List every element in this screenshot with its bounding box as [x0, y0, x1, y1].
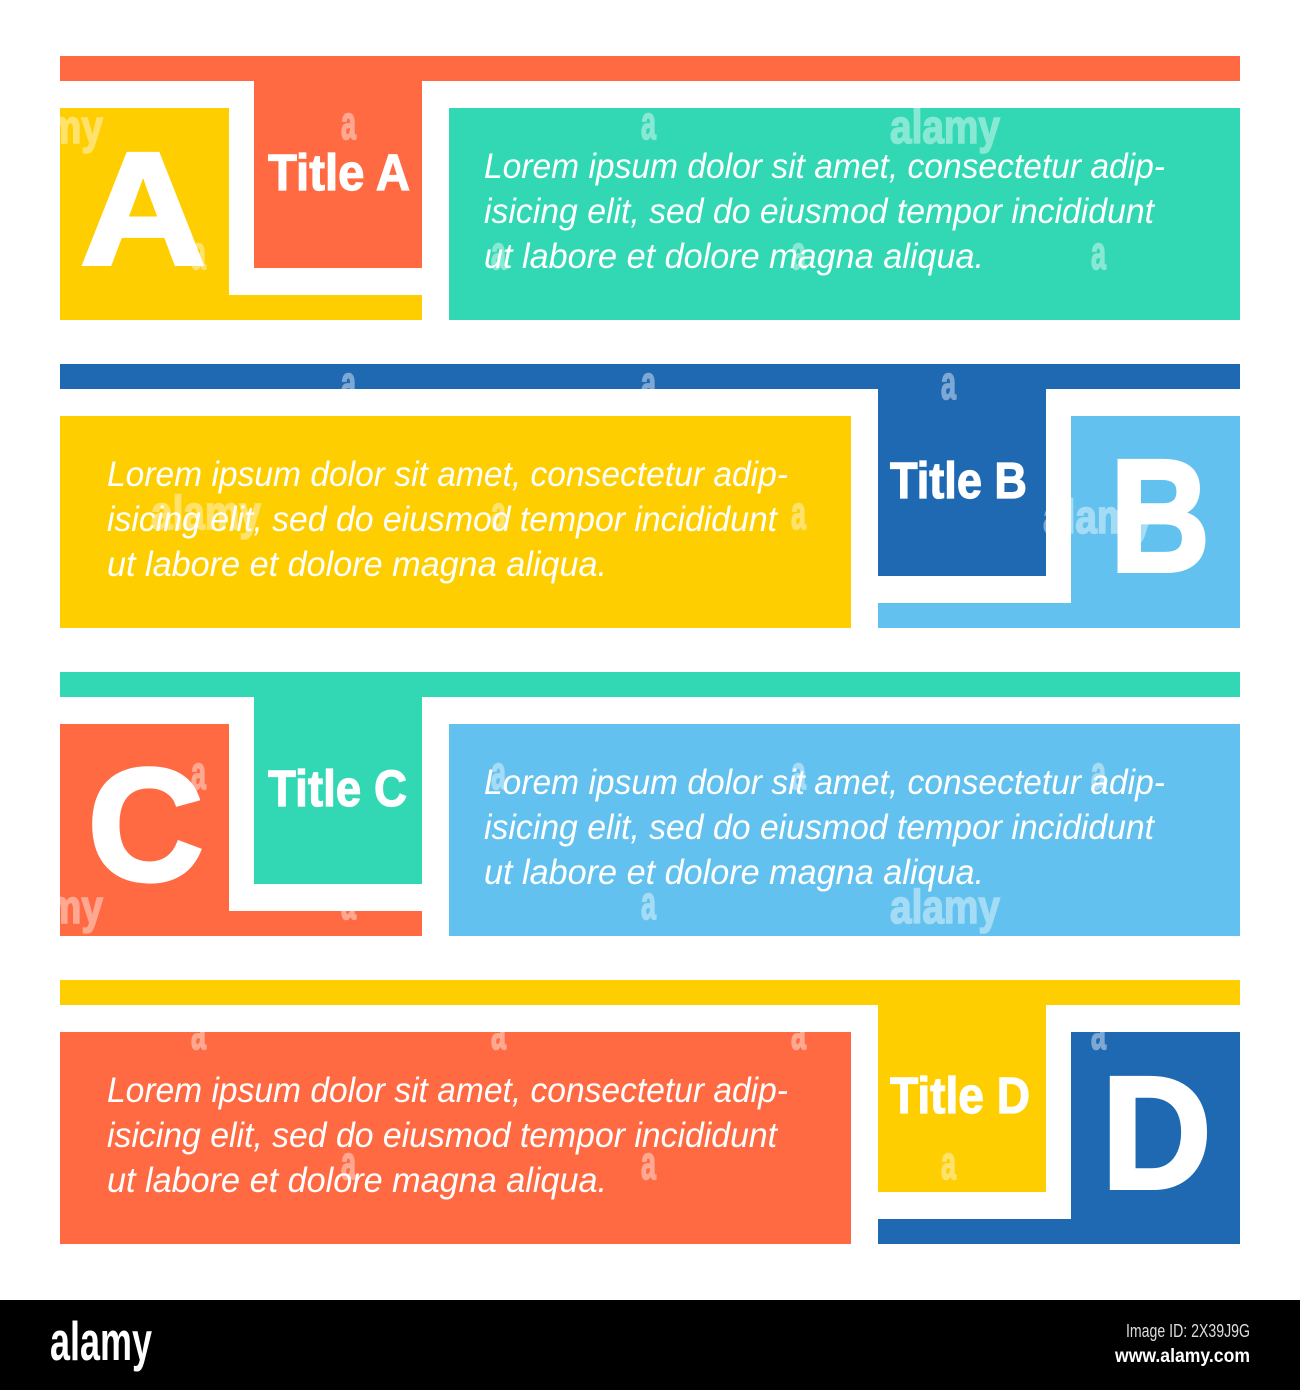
big letter C: C: [88, 735, 204, 914]
body text A: isicing elit, sed do eiusmod tempor incididunt: [484, 192, 1155, 231]
image id: Image ID: 2X39J9G: [1126, 1321, 1250, 1341]
watermark pattern: a: [641, 96, 656, 149]
big letter D: D: [1102, 1043, 1212, 1222]
watermark pattern: a: [491, 746, 506, 799]
panel: section B: [60, 364, 1240, 628]
text box B: [60, 416, 851, 628]
watermark pattern: a: [641, 876, 656, 929]
title C: Title C: [268, 760, 407, 817]
big letter A: A: [80, 119, 206, 298]
watermark pattern: a: [191, 226, 206, 279]
header bar with title tab A: [60, 56, 1240, 268]
body text D: Lorem ipsum dolor sit amet, consectetur adip-: [107, 1071, 788, 1110]
body text D: ut labore et dolore magna aliqua.: [107, 1161, 607, 1200]
watermark pattern: a: [941, 356, 956, 409]
watermark pattern: a: [491, 1006, 506, 1059]
body text B: ut labore et dolore magna aliqua.: [107, 545, 607, 584]
body text B: Lorem ipsum dolor sit amet, consectetur adip-: [107, 455, 788, 494]
watermark pattern: [0, 96, 1153, 1189]
header bar with title tab B: [60, 364, 1240, 576]
body text A: [484, 147, 1165, 276]
body text B: isicing elit, sed do eiusmod tempor incididunt: [107, 500, 778, 539]
title B: Title B: [890, 452, 1027, 509]
letter box C: [60, 724, 422, 936]
watermark pattern: a: [791, 486, 806, 539]
watermark pattern: a: [941, 1136, 956, 1189]
watermark pattern: alamy: [1043, 490, 1153, 543]
body text C: isicing elit, sed do eiusmod tempor incididunt: [484, 808, 1155, 847]
watermark pattern: a: [491, 226, 506, 279]
panel: section A: [60, 56, 1240, 320]
watermark pattern: alamy: [890, 880, 1000, 933]
letter box B: [878, 416, 1240, 628]
body text C: [484, 763, 1165, 892]
big letter B: B: [1110, 426, 1210, 605]
header bar with title tab D: [60, 980, 1240, 1192]
watermark pattern: alamy: [890, 100, 1000, 153]
body text C: ut labore et dolore magna aliqua.: [484, 853, 984, 892]
watermark pattern: a: [1091, 226, 1106, 279]
watermark pattern: a: [191, 746, 206, 799]
watermark pattern: a: [641, 1136, 656, 1189]
watermark pattern: a: [791, 1006, 806, 1059]
body text B: [107, 455, 788, 584]
watermark pattern: a: [491, 486, 506, 539]
watermark pattern: a: [641, 356, 656, 409]
watermark pattern: a: [1091, 1006, 1106, 1059]
watermark pattern: a: [791, 226, 806, 279]
header bar with title tab C: [60, 672, 1240, 884]
watermark pattern: a: [341, 96, 356, 149]
watermark pattern: a: [341, 356, 356, 409]
panel: section C: [60, 672, 1240, 936]
watermark pattern: a: [191, 1006, 206, 1059]
body text A: ut labore et dolore magna aliqua.: [484, 237, 984, 276]
footer logo: alamy: [50, 1310, 152, 1372]
text box C: [449, 724, 1240, 936]
letter box D: [878, 1032, 1240, 1244]
text box A: [449, 108, 1240, 320]
body text A: Lorem ipsum dolor sit amet, consectetur adip-: [484, 147, 1165, 186]
text box D: [60, 1032, 851, 1244]
watermark pattern: a: [791, 746, 806, 799]
body text D: [107, 1071, 788, 1200]
body text C: Lorem ipsum dolor sit amet, consectetur adip-: [484, 763, 1165, 802]
watermark pattern: alamy: [151, 486, 261, 539]
watermark pattern: a: [341, 1136, 356, 1189]
watermark pattern: a: [341, 876, 356, 929]
panel: section D: [60, 980, 1240, 1244]
body text D: isicing elit, sed do eiusmod tempor incididunt: [107, 1116, 778, 1155]
title D: Title D: [890, 1067, 1030, 1124]
letter box A: [60, 108, 422, 320]
watermark pattern: a: [1091, 746, 1106, 799]
title A: Title A: [268, 144, 410, 201]
website: www.alamy.com: [1114, 1346, 1250, 1367]
footer credit bar: [0, 1300, 1300, 1390]
